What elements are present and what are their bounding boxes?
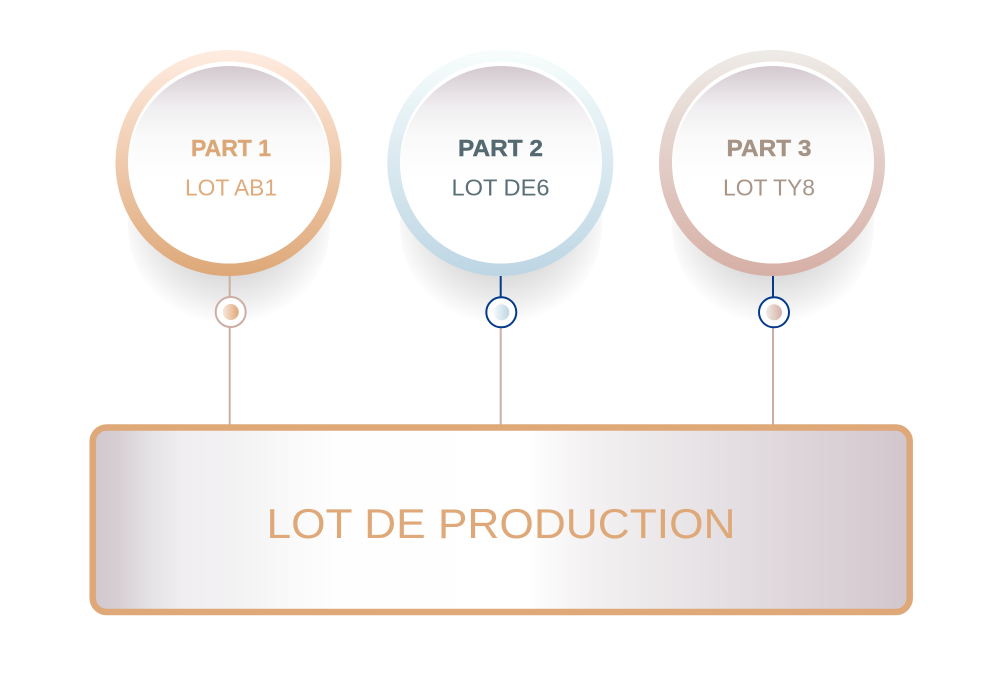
circle: part 1 (116, 50, 342, 276)
label: lot TY8: LOT TY8 (723, 174, 815, 200)
label: lot AB1: LOT AB1 (185, 174, 277, 200)
heading: part 3: PART 3 (726, 135, 812, 161)
node: part 2 (486, 297, 516, 327)
shadow: part 1 (128, 124, 330, 326)
label: lot DE6: LOT DE6 (452, 174, 550, 200)
production lot title: LOT DE PRODUCTION (266, 500, 736, 547)
shadow: part 2 (400, 124, 602, 326)
connector: part 3 to production lot (772, 270, 774, 426)
circle: part 3 (659, 50, 885, 276)
production lot box (93, 428, 910, 612)
node: part 1 (216, 297, 246, 327)
heading: part 1: PART 1 (191, 135, 271, 161)
connector: part 1 to production lot (229, 270, 231, 426)
heading: part 2: PART 2 (458, 135, 543, 161)
circle: part 2 (387, 50, 613, 276)
node: part 3 (759, 297, 789, 327)
connector: part 2 to production lot (500, 270, 502, 426)
shadow: part 3 (672, 124, 874, 326)
